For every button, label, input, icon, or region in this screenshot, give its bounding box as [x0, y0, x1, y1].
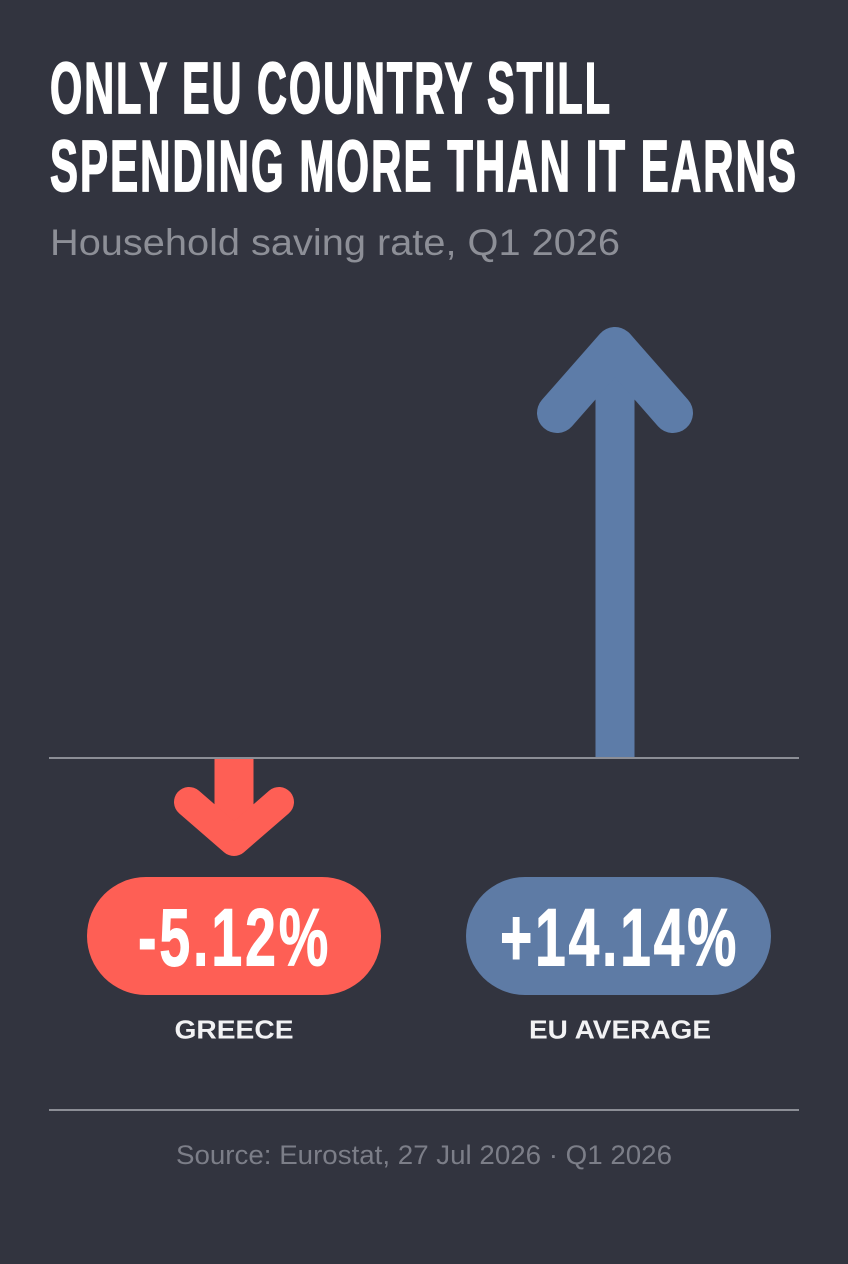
badge: EU average value: +14.14%	[500, 892, 739, 984]
title	[50, 49, 798, 207]
badge: EU average value	[466, 877, 771, 995]
badge: Greece value: -5.12%	[138, 892, 331, 984]
badge: Greece value	[87, 877, 381, 995]
label: Greece: GREECE	[174, 1014, 294, 1044]
footer divider	[49, 1109, 799, 1111]
icon: EU average up arrow	[557, 347, 673, 757]
source: Source: Eurostat, 27 Jul 2026 · Q1 2026	[176, 1140, 672, 1170]
icon: Greece down arrow	[189, 759, 279, 841]
baseline	[49, 757, 799, 759]
label: EU average: EU AVERAGE	[529, 1014, 711, 1044]
subtitle: Household saving rate, Q1 2026	[50, 222, 620, 263]
